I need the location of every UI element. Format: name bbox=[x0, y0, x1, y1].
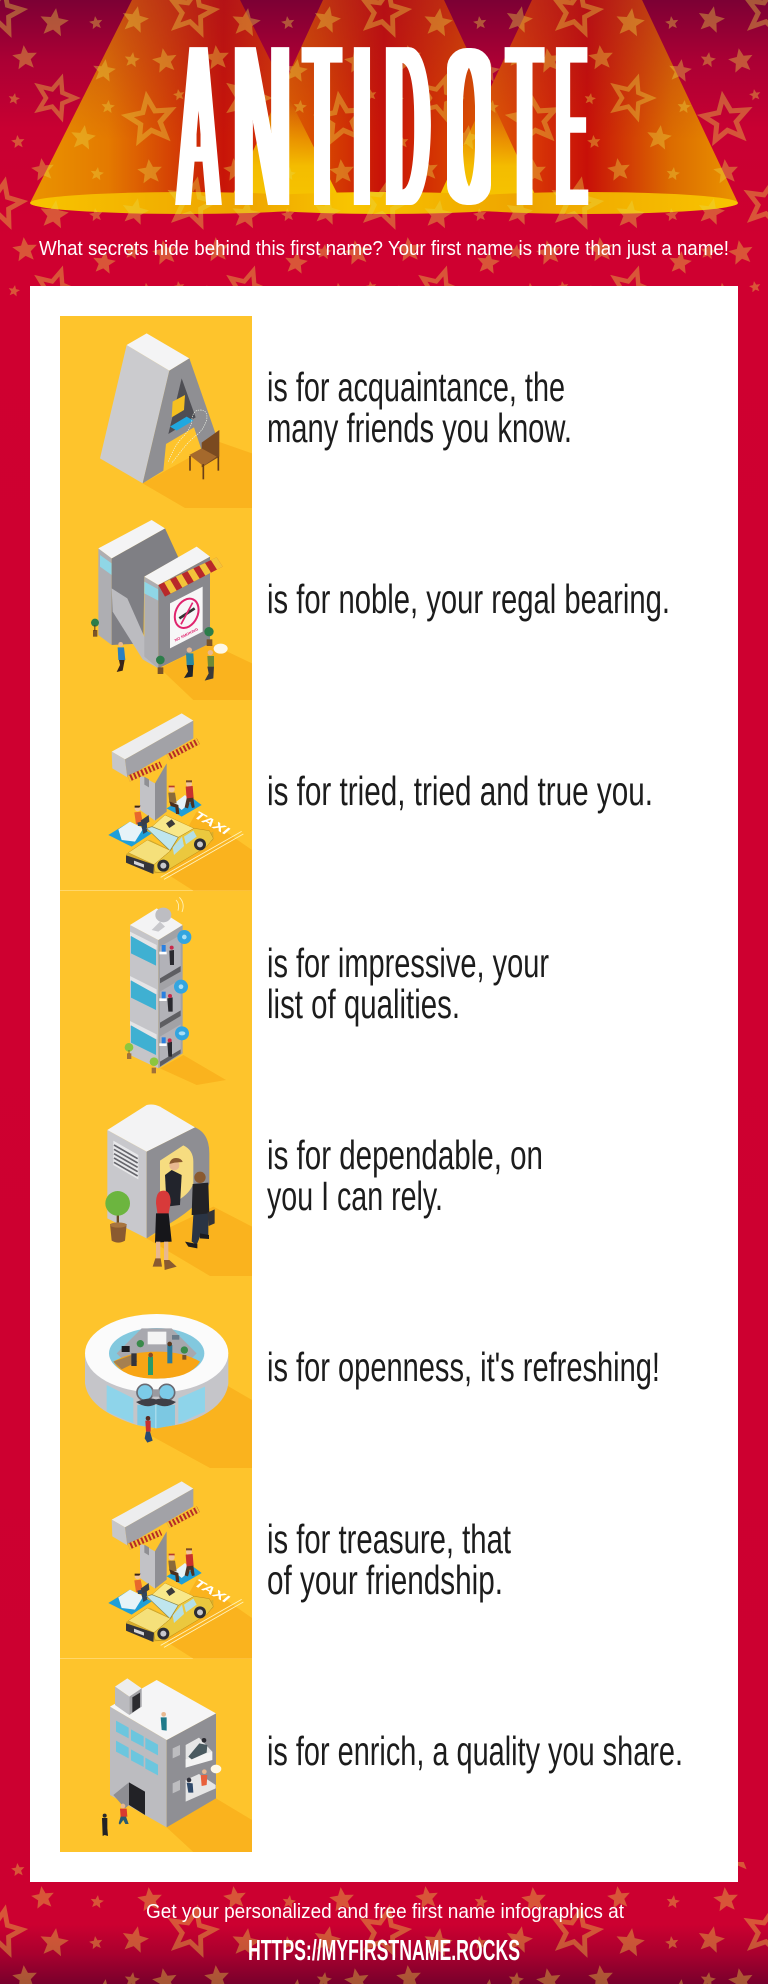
icon: letter D with people bbox=[105, 1104, 252, 1276]
text: letter A line bbox=[267, 364, 572, 451]
icon: letter E building bbox=[102, 1678, 252, 1852]
icon: letter N with no smoking sign: NO SMOKING bbox=[174, 627, 199, 643]
text: letter D line: you I can rely. bbox=[267, 1173, 443, 1219]
icon: letter O ring shop bbox=[85, 1314, 252, 1468]
text: letter D line: is for dependable, on bbox=[267, 1132, 543, 1178]
icon: letter T with taxi (second) bbox=[108, 1481, 252, 1659]
icon: letter T with taxi bbox=[108, 713, 252, 891]
text: letter I line: list of qualities. bbox=[267, 981, 460, 1027]
icon: letter I tower bbox=[125, 897, 226, 1085]
panel: white content card bbox=[30, 286, 738, 1882]
subtitle: What secrets hide behind this first name? Your first name is more than just a name! bbox=[39, 238, 729, 260]
text: letter T second line bbox=[267, 1516, 511, 1603]
footer url: HTTPS://MYFIRSTNAME.ROCKS bbox=[248, 1935, 520, 1967]
text: letter I line bbox=[267, 940, 549, 1027]
text: letter T second line: is for treasure, that bbox=[267, 1516, 511, 1562]
spotlights header bbox=[30, 0, 738, 214]
text: letter A line: is for acquaintance, the bbox=[267, 364, 565, 410]
icon: letter N with no smoking sign bbox=[91, 520, 252, 700]
panel: yellow illustration column bbox=[60, 316, 252, 1852]
text: letter A line: many friends you know. bbox=[267, 405, 572, 451]
footer text: Get your personalized and free first name infographics at bbox=[146, 1901, 624, 1923]
title: O bbox=[449, 0, 489, 258]
text: letter D line bbox=[267, 1132, 543, 1219]
text: letter T second line: of your friendship. bbox=[267, 1557, 503, 1603]
title bbox=[176, 0, 586, 265]
text: letter I line: is for impressive, your bbox=[267, 940, 549, 986]
icon: letter A with chair bbox=[100, 333, 252, 508]
